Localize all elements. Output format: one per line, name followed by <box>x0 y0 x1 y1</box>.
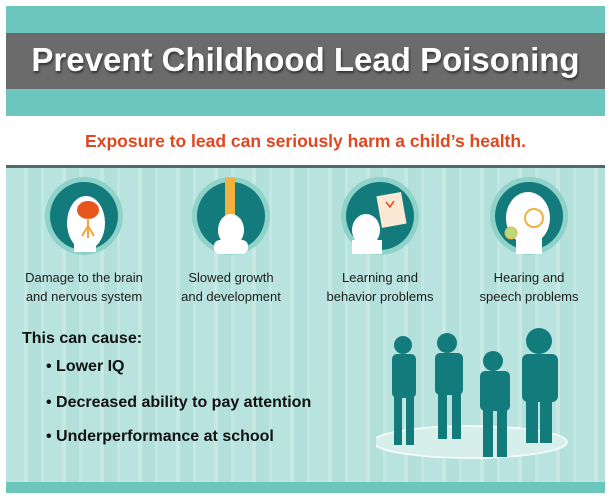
label: learning: Learning and <box>342 270 418 285</box>
label: brain: Damage to the brain <box>25 270 143 285</box>
bullet list: • Decreased ability to pay attention <box>46 394 311 411</box>
heading: this can cause: This can cause: <box>22 330 142 347</box>
label: growth <box>181 270 281 304</box>
label: learning <box>327 270 433 304</box>
icon: learning <box>341 177 419 255</box>
label: learning: behavior problems <box>327 289 433 304</box>
illustration: children <box>376 328 568 459</box>
icon: brain <box>45 177 123 255</box>
subtitle: Exposure to lead can seriously harm a child’s health. <box>85 131 526 151</box>
icon: growth <box>192 177 270 255</box>
main panel <box>6 165 605 493</box>
title banner <box>6 33 605 89</box>
icons row <box>45 177 568 255</box>
bottom strip <box>6 482 605 493</box>
subtitle <box>6 116 605 166</box>
label: hearing <box>480 270 578 304</box>
label: hearing: speech problems <box>480 289 578 304</box>
label: growth: and development <box>181 289 281 304</box>
label: growth: Slowed growth <box>188 270 274 285</box>
label: brain: and nervous system <box>26 289 142 304</box>
title banner: Prevent Childhood Lead Poisoning <box>31 41 580 78</box>
bullet list: • Underperformance at school <box>46 428 274 445</box>
label: brain <box>25 270 143 304</box>
header band <box>6 6 605 116</box>
bullet list: • Lower IQ <box>46 358 124 375</box>
icon: hearing <box>490 177 568 255</box>
label: hearing: Hearing and <box>494 270 564 285</box>
bullet list <box>46 358 311 445</box>
